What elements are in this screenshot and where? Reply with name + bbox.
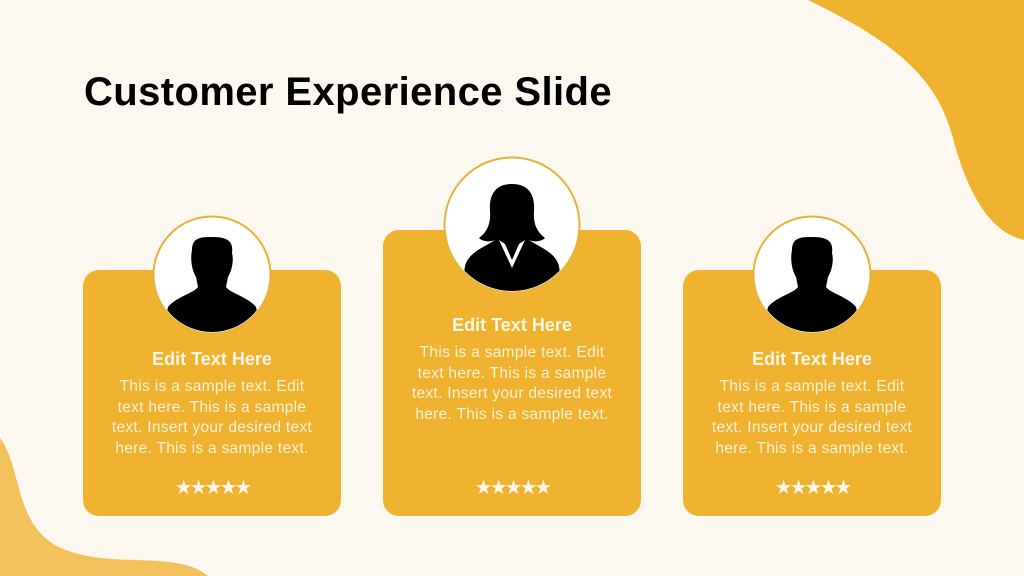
title: Customer Experience Slide bbox=[84, 70, 612, 114]
card: middle: text. Insert your desired text bbox=[412, 385, 612, 402]
card: left: Edit Text Here bbox=[152, 349, 272, 369]
card: right: This is a sample text. Edit bbox=[720, 378, 904, 395]
card: left: here. This is a sample text. bbox=[115, 440, 309, 456]
avatar: left man bbox=[152, 216, 272, 334]
avatar: right man bbox=[752, 216, 872, 334]
card: right bbox=[683, 270, 941, 516]
card: right: Edit Text Here bbox=[752, 349, 872, 369]
card: right: ★★★★★ bbox=[775, 477, 849, 499]
card: middle: ★★★★★ bbox=[475, 477, 549, 499]
card: right: text here. This is a sample bbox=[718, 398, 906, 416]
card: middle: text here. This is a sample bbox=[418, 364, 606, 382]
card: left: ★★★★★ bbox=[175, 477, 249, 499]
card: middle: This is a sample text. Edit bbox=[420, 344, 604, 361]
card: left bbox=[83, 270, 341, 516]
card: right: text. Insert your desired text bbox=[712, 419, 912, 436]
card: left: This is a sample text. Edit bbox=[120, 378, 304, 395]
card: left: text. Insert your desired text bbox=[112, 419, 312, 436]
card: middle: here. This is a sample text. bbox=[415, 406, 609, 422]
card: middle bbox=[383, 230, 641, 516]
card: left: text here. This is a sample bbox=[118, 398, 306, 416]
card: middle: Edit Text Here bbox=[452, 315, 572, 335]
avatar: middle woman bbox=[444, 156, 580, 294]
card: right: here. This is a sample text. bbox=[715, 440, 909, 456]
